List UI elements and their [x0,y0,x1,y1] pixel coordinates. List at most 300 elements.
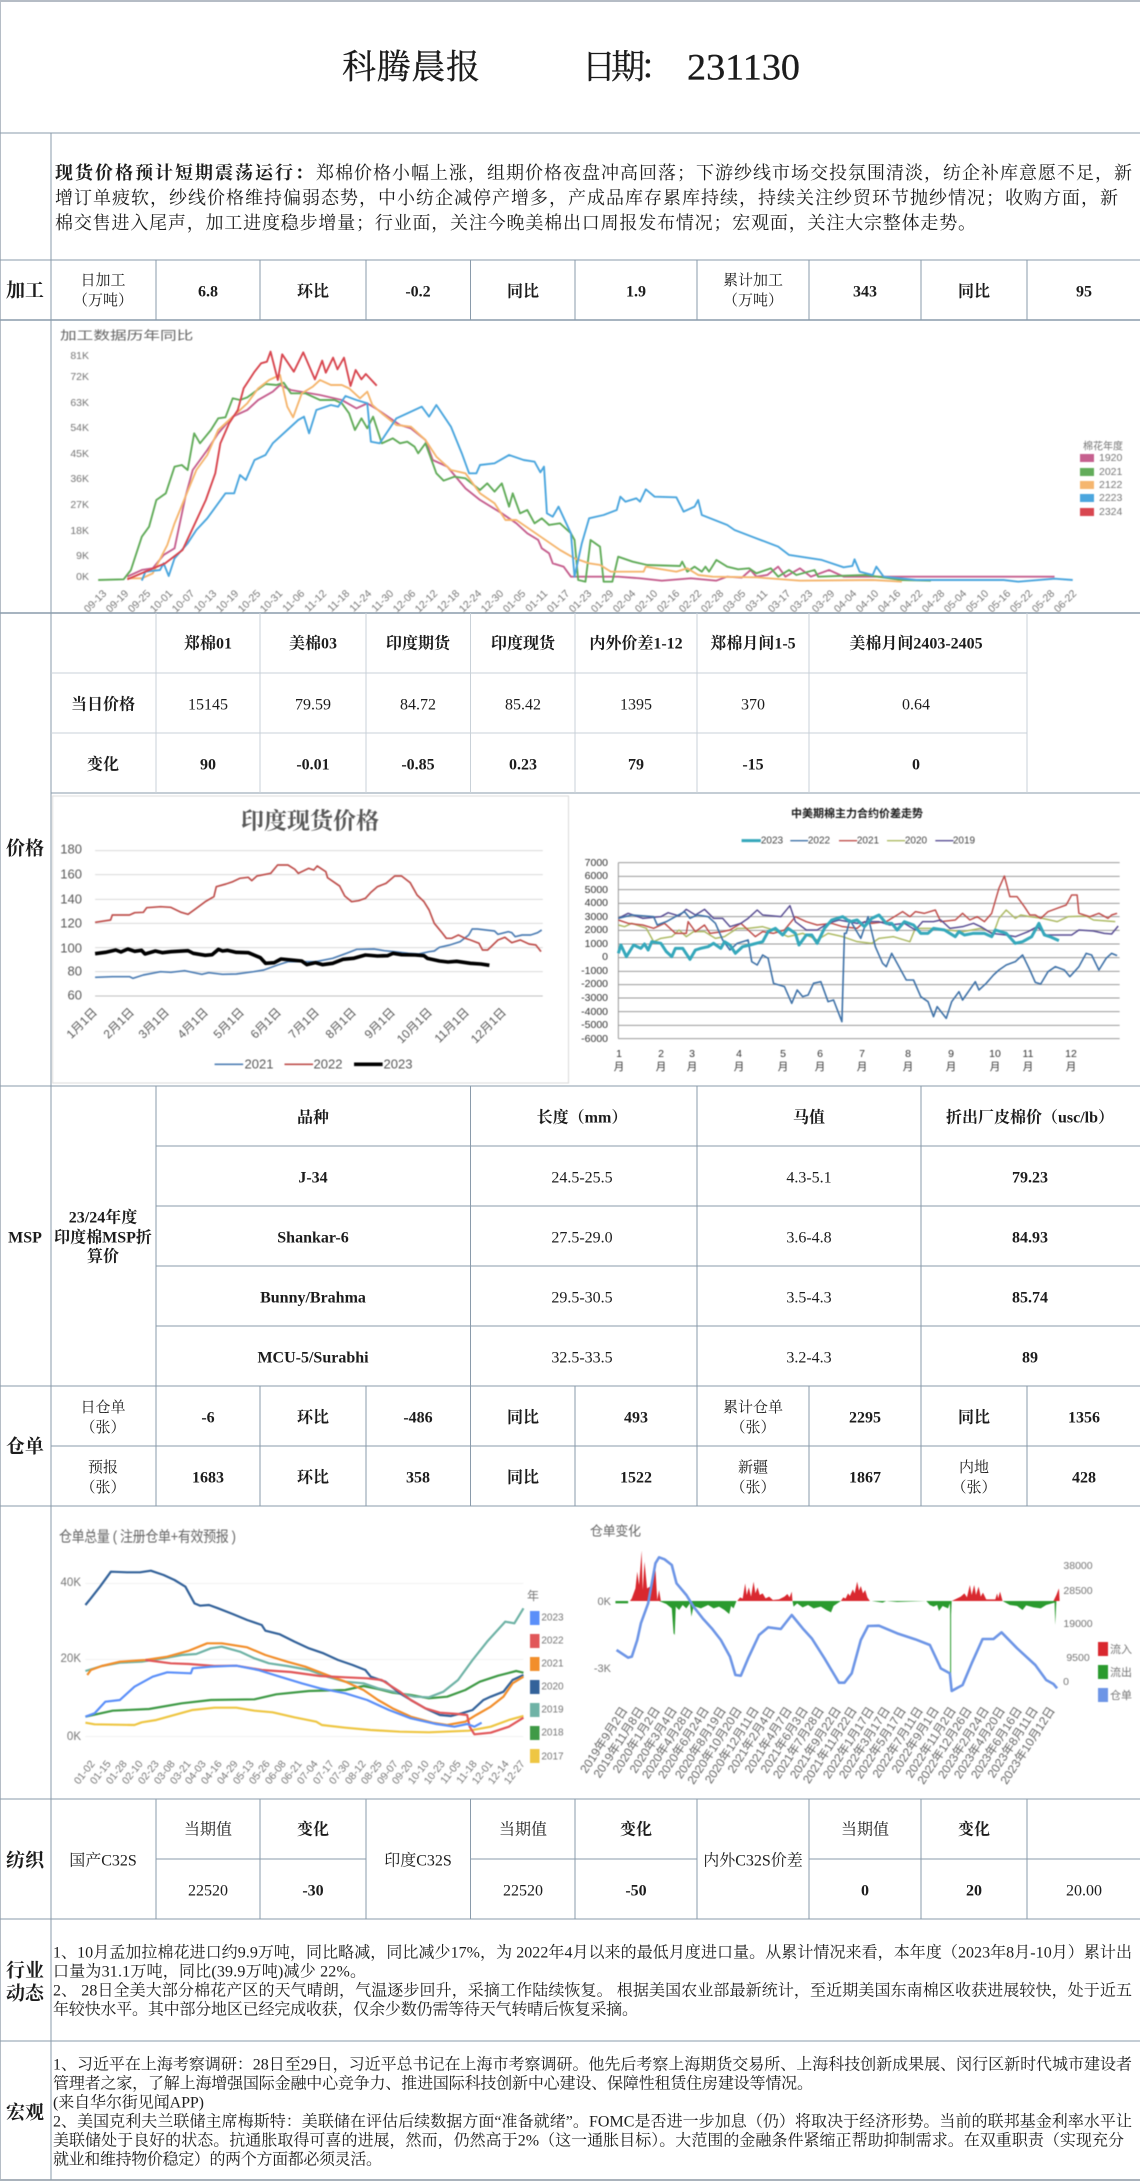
x axis labels: 06-08 [263,1758,289,1787]
text block: macro news [53,2056,1132,2168]
panel: processing row: 1.9 [626,284,646,300]
y axis labels [61,1577,81,1743]
x axis labels: 12-14 [486,1758,512,1787]
x axis labels: 2023年6月16日 [968,1704,1025,1781]
right axis labels [1063,1560,1093,1688]
row J-34 [298,1170,1048,1186]
panel: processing row [6,272,1092,309]
x axis labels: 03-23 [788,588,815,615]
x axis labels: 11-12 [302,588,329,615]
row daily receipts: 同比 [507,1408,539,1426]
x axis labels: 9月1日 [362,1005,398,1041]
x axis labels: 7月1日 [286,1005,322,1041]
x axis labels: 2021年2月4日 [725,1704,778,1776]
text block: industry news: 1、10月孟加拉棉花进口约9.9万吨，同比略减，同比减少17%，为 2022年4月以来的最低月度进口量。从累计情况来看，本年度（2023年8月-10月）累计出 [53,1942,1132,1962]
x axis labels: 月 [990,1061,1000,1073]
x axis labels: 2022年11月2日 [903,1704,959,1780]
text block: macro news: 就业和维持物价稳定）的两个方面都必须灵活。 [53,2150,382,2168]
legend labels: 2020 [905,836,928,846]
x axis labels: 2022年7月11日 [870,1704,926,1780]
current price row: 85.42 [505,696,541,714]
y axis labels: 36K [70,473,89,485]
y axis labels: -3000 [581,992,608,1004]
MSP description: 印度棉MSP折 [54,1228,152,1246]
x axis labels: 12-18 [435,588,462,615]
x axis labels: 11 [1023,1048,1034,1060]
panel: processing row: 同比 [507,282,539,300]
y axis labels: 60 [68,988,82,1002]
x axis labels: 03-11 [743,588,770,615]
panel: processing row: 95 [1076,284,1092,300]
row forecast: 同比 [507,1468,539,1486]
x axis labels: 2019年9月2日 [577,1704,630,1776]
x axis labels: 05-04 [942,588,969,615]
x axis labels: 月 [734,1061,744,1073]
x axis labels: 04-03 [183,1758,209,1787]
x axis labels: 05-26 [247,1758,273,1787]
x axis labels: 2019年11月8日 [591,1704,647,1780]
domestic C32S: -30 [302,1882,324,1900]
row MCU-5/Surabhi: MCU-5/Surabhi [257,1350,369,1366]
x axis labels: 09-19 [104,588,131,615]
x axis labels [64,1005,509,1046]
y axis labels: 180 [60,842,82,856]
text block: macro news: 2、美国克利夫兰联储主席梅斯特：美联储在评估后续数据方面“准备就绪”。FOMC是否进一步加息（仍）将取决于经济形势。当前的联邦基金利率水平让 [53,2112,1132,2130]
x axis labels: 04-29 [215,1758,241,1787]
x axis labels: 10-10 [406,1758,432,1787]
x axis labels: 08-25 [359,1758,385,1787]
x axis labels: 10-31 [258,588,285,615]
y axis labels: 3000 [585,911,608,923]
panel: MSP table [8,1108,1114,1366]
table header: 内外价差1-12 [589,634,683,652]
y axis labels: 100 [60,940,82,956]
current price row: 84.72 [400,696,436,714]
title [342,48,800,88]
row Shankar-6: 27.5-29.0 [551,1230,613,1246]
row MCU-5/Surabhi [257,1350,1038,1366]
line series [85,1571,523,1737]
row forecast: 内地 [959,1458,989,1476]
y axis labels: 9K [76,550,89,562]
legend: 2019 [541,1704,564,1716]
x axis labels: 01-11 [523,588,550,615]
row forecast: 新疆 [738,1459,768,1476]
legend: 2021 [541,1658,564,1670]
x axis labels: 05-22 [1008,588,1035,615]
row Bunny/Brahma: 85.74 [1012,1290,1048,1306]
x axis labels: 1月1日 [64,1005,100,1041]
x axis labels: 04-28 [920,588,947,615]
row Bunny/Brahma [260,1290,1048,1306]
line series [95,851,543,1064]
panel: processing row: 累计加工 [723,272,783,289]
line series [618,841,1120,1039]
x axis labels: 09-25 [126,588,153,615]
C32S spread: 0 [861,1882,869,1900]
x axis labels: 8月1日 [323,1005,359,1041]
row daily receipts: 环比 [297,1408,329,1426]
y axis labels: 45K [70,448,89,460]
panel: processing row: 环比 [297,282,329,300]
text block: macro news: 1、习近平在上海考察调研：28日至29日，习近平总书记在上海市考察调研。他先后考察上海期货交易所、上海科技创新成果展、闵行区新时代城市建设者 [53,2056,1132,2074]
C32S spread: 20.00 [1066,1882,1102,1900]
x axis labels: 07-30 [327,1758,353,1787]
summary text block [55,162,1132,233]
y axis labels: 0K [67,1731,81,1743]
x axis labels: 月 [815,1061,825,1073]
x axis labels: 2021年6月3日 [758,1704,811,1776]
y axis labels: 27K [70,499,89,511]
x axis labels: 月 [857,1061,867,1073]
y axis labels: 120 [60,916,82,930]
y axis labels: 72K [70,371,89,383]
left axis labels: 0K [598,1596,612,1608]
legend labels: 2023 [384,1056,412,1072]
x axis labels: 03-21 [168,1758,194,1787]
chart: total warehouse receipts [59,1527,564,1787]
x axis labels: 4 [736,1048,742,1060]
India C32S: 22520 [503,1882,543,1900]
x axis labels: 12 [1065,1048,1077,1060]
y axis labels: 81K [70,350,89,362]
India C32S [384,1820,652,1900]
chart title: 中美期棉主力合约价差走势 [791,806,923,820]
row MCU-5/Surabhi: 89 [1022,1350,1038,1366]
right axis labels: 0 [1063,1676,1069,1688]
y axis labels: 7000 [585,857,608,869]
row forecast: 1522 [620,1470,652,1486]
chart: warehouse receipt change [577,1524,1132,1787]
text block: industry news [53,1942,1132,2018]
left axis labels [594,1596,612,1675]
x axis labels: 2022年3月17日 [836,1704,893,1781]
domestic C32S: 国产C32S [69,1852,137,1870]
legend [1098,1642,1132,1702]
section label: macro: 宏观 [6,2102,44,2124]
y axis labels: 2000 [585,924,608,936]
x axis labels: 11月1日 [432,1005,472,1045]
x axis labels: 2 [658,1048,664,1060]
header row: 折出厂皮棉价（usc/lb） [946,1108,1114,1126]
table header: 郑棉01 [184,634,232,652]
section label: industry news: 动态 [6,1982,46,2004]
x axis labels: 2020年12月11日 [702,1704,762,1786]
chart title: 印度现货价格 [241,808,379,834]
C32S spread: 内外C32S价差 [703,1852,803,1870]
y axis labels: 63K [70,397,89,409]
x axis labels: 月 [687,1061,697,1073]
x axis labels: 02-28 [699,588,726,615]
x axis labels: 6月1日 [248,1005,284,1041]
x axis labels: 12月1日 [468,1005,509,1046]
x axis labels: 2021年11月22日 [800,1704,860,1786]
chart title: 加工数据历年同比 [60,329,193,343]
inflow, outflow and stock series [615,1551,1060,1691]
row daily receipts: 日仓单 [80,1399,126,1416]
x axis labels: 12-24 [457,588,484,615]
header row: 马值 [793,1108,825,1126]
y axis labels: 1000 [585,938,608,950]
panel: processing row: （万吨） [73,292,133,309]
legend: 仓单 [1110,1688,1132,1702]
x axis labels [82,588,1079,615]
x axis labels: 12-01 [470,1758,496,1787]
change row: 90 [200,756,216,774]
x axis labels: 01-23 [567,588,594,615]
panel: warehouse receipts table [6,1399,1100,1496]
India C32S: -50 [625,1882,647,1900]
chart title: 仓单总量 ( 注册仓单+有效预报 ) [59,1527,236,1545]
x axis labels: 月 [656,1061,666,1073]
row MCU-5/Surabhi: 32.5-33.5 [551,1350,613,1366]
y axis labels [70,350,89,583]
current price row: 当日价格 [71,694,135,714]
y axis labels: 18K [70,525,89,537]
x axis labels: 2023年10月12日 [997,1704,1058,1787]
India C32S: 印度C32S [384,1852,452,1870]
panel: price table [6,634,983,860]
y axis labels: 5000 [585,884,608,896]
chart: processing data year on year [60,329,1123,615]
y axis labels: -2000 [581,978,608,990]
x axis labels: 9 [948,1048,954,1060]
x axis labels: 11-06 [280,588,307,615]
legend: 2022 [541,1636,564,1646]
y axis labels [60,842,82,1002]
title: 科腾晨报 [342,48,480,86]
row daily receipts: 2295 [849,1410,881,1426]
summary text block: 郑棉价格小幅上涨，组期价格夜盘冲高回落；下游纱线市场交投氛围清淡，纺企补库意愿不足，新 [316,162,1132,183]
change row: 79 [628,756,644,774]
India C32S: 当期值 [499,1820,547,1838]
x axis labels: 2023年8月11日 [985,1704,1041,1780]
legend: 2324 [1099,506,1123,518]
header row: 长度（mm） [537,1108,627,1126]
change row [87,754,920,774]
panel: processing row: 343 [853,284,877,300]
x axis labels: 2023年2月24日 [935,1704,992,1781]
row forecast: 428 [1072,1470,1096,1486]
legend: 2122 [1099,479,1123,491]
row forecast: 1867 [849,1470,881,1486]
row Bunny/Brahma: 29.5-30.5 [551,1290,613,1306]
x axis labels: 09-07 [375,1758,401,1787]
x axis labels: 2022年9月1日 [889,1704,942,1776]
legend: 流出 [1110,1665,1132,1679]
summary text block: 棉交售进入尾声，加工进度稳步增量；行业面，关注今晚美棉出口周报发布情况；宏观面，关注大宗整体走势。 [55,212,976,233]
x axis labels: 05-10 [964,588,991,615]
title: 日期： [582,50,674,86]
x axis labels: 2020年10月20日 [684,1704,745,1787]
legend labels: 2021 [245,1056,273,1072]
legend: 2021 [1099,466,1123,478]
x axis labels: 11-30 [369,588,396,615]
header row [297,1108,1114,1126]
x axis labels: 10-07 [170,588,197,615]
current price row: 370 [741,696,765,714]
x axis labels: 02-16 [655,588,682,615]
x axis labels: 12-27 [502,1758,528,1787]
legend: 1920 [1099,452,1123,464]
y axis labels: 4000 [585,897,608,909]
legend: 2017 [541,1752,564,1762]
domestic C32S: 22520 [188,1882,228,1900]
row MCU-5/Surabhi: 3.2-4.3 [786,1350,832,1366]
C32S spread: 当期值 [841,1820,889,1838]
row Shankar-6: 84.93 [1012,1230,1048,1246]
row Bunny/Brahma: 3.5-4.3 [786,1290,832,1306]
right axis labels: 38000 [1063,1560,1093,1572]
C32S spread: 20 [966,1882,982,1900]
row forecast: 1683 [192,1470,224,1486]
change row: 0.23 [509,756,537,774]
x axis labels: 12-12 [413,588,440,615]
legend [527,1589,564,1763]
section label: 纺织 [6,1850,46,1872]
table header: 美棉月间2403-2405 [849,634,983,652]
row forecast [80,1458,1096,1496]
x axis labels: 04-22 [898,588,925,615]
domestic C32S [69,1820,329,1900]
change row: 0 [912,756,920,774]
C32S spread: 变化 [958,1820,990,1838]
row forecast: （张） [730,1479,776,1496]
x axis labels: 6 [817,1048,823,1060]
domestic C32S: 变化 [297,1820,329,1838]
x axis labels: 2021年7月28日 [770,1704,827,1781]
row Shankar-6: 3.6-4.8 [786,1230,832,1246]
x axis labels: 10-23 [422,1758,448,1787]
x axis labels: 03-08 [152,1758,178,1787]
x axis labels: 04-16 [876,588,903,615]
y axis labels: -5000 [581,1019,608,1031]
x axis labels: 7 [859,1048,865,1060]
x axis labels: 11-24 [347,588,374,615]
x axis labels: 11-18 [454,1758,480,1786]
x axis labels: 月 [946,1061,956,1073]
x axis labels: 12-06 [391,588,418,615]
section label: industry news [6,1960,46,2004]
panel: processing row: （万吨） [723,292,783,309]
table header: 郑棉月间1-5 [710,634,796,652]
y axis labels: 0K [76,571,89,583]
panel: processing row: 加工 [6,280,44,302]
row J-34: 24.5-25.5 [551,1170,613,1186]
y axis labels: 20K [61,1653,81,1665]
change row: 变化 [87,754,119,774]
row Shankar-6: Shankar-6 [277,1230,349,1246]
table header: 美棉03 [289,634,337,652]
table header [184,634,983,652]
x axis labels: 2021年9月22日 [787,1704,844,1781]
x axis labels: 03-17 [766,588,793,615]
x axis labels: 05-13 [231,1758,257,1787]
x axis labels: 月 [614,1061,624,1073]
x axis labels: 01-02 [72,1758,98,1787]
x axis labels: 02-23 [136,1758,162,1787]
x axis labels: 01-29 [589,588,616,615]
x axis labels: 2023年4月20日 [951,1704,1008,1781]
row forecast: 358 [406,1470,430,1486]
x axis labels: 2020年1月2日 [610,1704,663,1776]
x axis labels: 10-25 [236,588,263,615]
legend: 2018 [541,1728,564,1738]
x axis labels: 03-29 [810,588,837,615]
x axis labels: 3 [689,1048,695,1060]
y axis labels: -4000 [581,1006,608,1018]
row daily receipts: 累计仓单 [723,1399,783,1416]
x axis labels: 04-10 [854,588,881,615]
current price row: 15145 [188,696,228,714]
legend: 2020 [541,1682,564,1692]
x axis labels: 05-16 [986,588,1013,615]
row Shankar-6 [277,1230,1048,1246]
x axis labels [72,1758,528,1787]
C32S spread [703,1820,1102,1900]
row forecast: 预报 [88,1458,118,1476]
x axis labels: 5 [780,1048,786,1060]
row Bunny/Brahma: Bunny/Brahma [260,1290,366,1306]
row daily receipts: （张） [730,1419,776,1436]
legend: 流入 [1110,1642,1132,1656]
row daily receipts: 1356 [1068,1410,1100,1426]
x axis labels: 04-16 [199,1758,225,1787]
x axis labels: 05-28 [1030,588,1057,615]
section label: 仓单 [6,1436,44,1458]
row forecast: （张） [80,1479,126,1496]
y axis labels: 80 [68,964,82,978]
x axis labels: 02-22 [677,588,704,615]
panel: processing row: 日加工 [80,272,126,289]
y axis labels: 40K [61,1577,81,1589]
panel: processing row: 同比 [958,282,990,300]
x axis labels: 06-21 [279,1758,305,1787]
legend: 2023 [541,1612,564,1624]
MSP description: 算价 [87,1246,119,1266]
row daily receipts: 同比 [958,1408,990,1426]
x axis labels: 11-05 [438,1758,464,1786]
row J-34: 4.3-5.1 [786,1170,832,1186]
y axis labels: 140 [60,892,82,906]
x axis labels: 01-15 [88,1758,114,1787]
x axis labels: 01-28 [104,1758,130,1787]
India C32S: 变化 [620,1820,652,1838]
chart title: 仓单变化 [590,1524,641,1538]
x axis labels: 2022年12月26日 [914,1704,975,1787]
x axis labels: 10月1日 [394,1005,435,1046]
x axis labels [577,1704,1058,1787]
x axis labels: 02-04 [611,588,638,615]
x axis labels: 03-05 [721,588,748,615]
x axis labels: 10-01 [148,588,175,615]
row forecast: 环比 [297,1468,329,1486]
x axis labels: 01-17 [545,588,572,615]
y axis labels [581,857,608,1045]
legend labels: 2021 [857,836,880,846]
x axis labels: 07-17 [311,1758,337,1787]
line series [98,352,1073,582]
text block: macro news: (来自华尔街见闻APP) [53,2094,204,2112]
legend: 棉花年度 [1083,440,1123,452]
y axis labels: -1000 [581,965,608,977]
x axis labels: 4月1日 [175,1005,211,1041]
table header: 印度现货 [491,634,557,652]
x axis labels: 04-04 [832,588,859,615]
chart: China-US futures spread [581,806,1120,1073]
x axis labels: 2020年3月4日 [627,1704,680,1776]
change row: -0.85 [401,756,435,774]
